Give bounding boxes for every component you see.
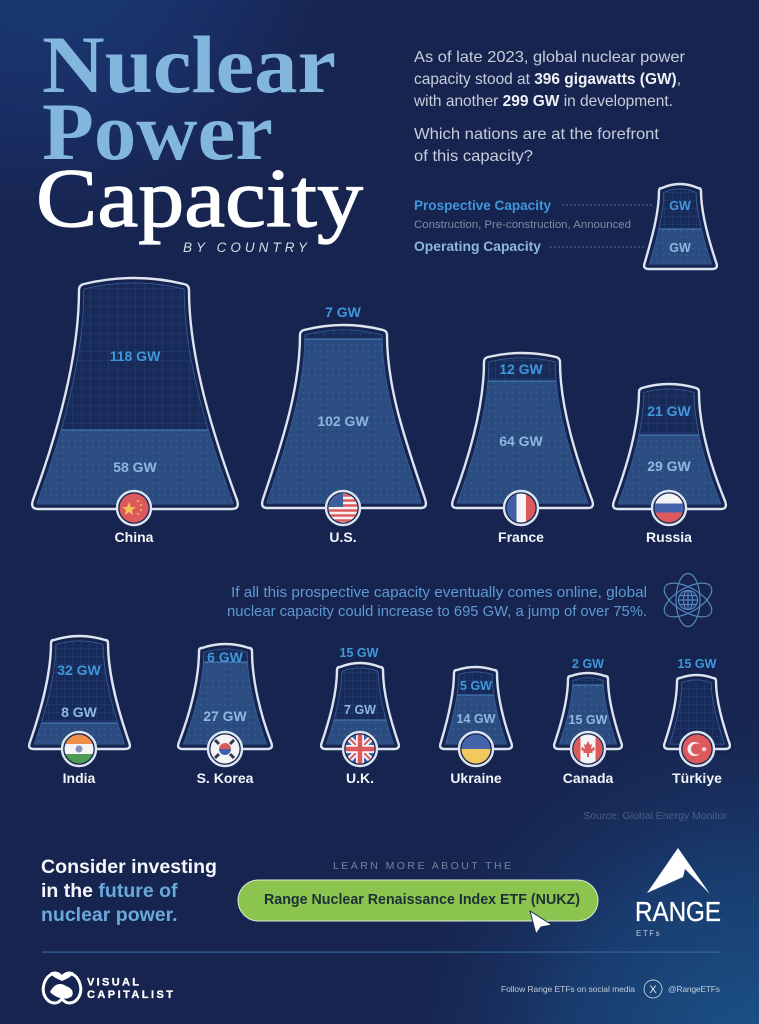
intro text: Which nations are at the forefront [414,126,660,143]
call to action text: nuclear power. [41,904,178,926]
callout [227,585,647,620]
tower: India: 8 GW [61,704,98,720]
tower: U.K. [318,646,403,786]
tower: China [30,270,240,545]
tower: U.S.: 7 GW [325,304,362,320]
tower: France: 64 GW [499,433,544,449]
tower: Russia: 21 GW [647,403,692,419]
icon: atom globe [659,574,717,626]
tower: France [448,348,596,545]
legend note: Construction, Pre-construction, Announced [414,219,631,231]
tower: Türkiye [660,657,735,786]
title: Power [42,86,273,177]
logo: Visual Capitalist: VISUAL [87,976,139,988]
label: Ukraine [450,770,502,786]
flag: U.K. [343,732,377,766]
icon: cursor [530,911,552,934]
label: China [115,529,154,545]
button [238,880,598,921]
flag: S. Korea [208,732,242,766]
tower: Canada [552,659,624,783]
legend label: operating capacity: Operating Capacity [414,239,542,254]
tower: Canada: 2 GW [572,657,604,671]
legend label: prospective capacity: Prospective Capacity [414,198,551,213]
label: France [498,529,544,545]
label: Canada [563,770,613,786]
flag: China [117,491,151,525]
tower: Ukraine: 14 GW [457,712,496,726]
subtitle: by country: BY COUNTRY [183,240,308,255]
tower: Ukraine [438,666,514,783]
call to action text: Consider investing [41,856,217,878]
flag: Türkiye [680,732,714,766]
logo: Range ETFs [635,848,721,938]
call to action text: in the future of [41,880,178,902]
callout: nuclear capacity could increase to 695 GW, a jump of over 75%. [227,604,647,620]
legend tower: GW [669,241,691,255]
tower: China: 58 GW [113,459,158,475]
icon: X: X [649,984,657,996]
callout: If all this prospective capacity eventually comes online, global [231,585,647,601]
intro text: capacity stood at 396 gigawatts (GW), [414,71,681,88]
social follow text: Follow Range ETFs on social media [501,984,635,994]
source: Source: Global Energy Monitor [583,810,727,822]
social handle: @RangeETFs [668,984,720,994]
label: India [63,770,96,786]
flag: Russia [652,491,686,525]
flag: Ukraine [459,732,493,766]
label: Türkiye [672,770,722,786]
flag: U.S. [326,491,360,525]
label: S. Korea [197,770,254,786]
tower: Ukraine: 5 GW [460,679,492,693]
logo: Visual Capitalist [43,972,173,1003]
logo: Range ETFs: RANGE [635,896,721,927]
label: U.K. [346,770,374,786]
tower: U.S. [258,304,430,545]
tower: India [25,630,135,786]
title [36,19,363,245]
tower: Russia: 29 GW [647,458,692,474]
tower: Russia [608,380,730,545]
tower: France: 12 GW [499,361,544,377]
flag: France [504,491,538,525]
tower: Canada: 15 GW [569,713,608,727]
legend tower: GW [669,199,691,213]
flag: Canada [571,732,605,766]
intro text: of this capacity? [414,148,533,165]
tower: China: 118 GW [110,348,161,364]
label: Russia [646,529,692,545]
intro text [413,49,686,165]
intro text: As of late 2023, global nuclear power [414,49,686,66]
tower: U.S.: 102 GW [317,413,369,429]
tower: India: 32 GW [57,662,102,678]
tower: S. Korea: 27 GW [203,708,248,724]
intro text: with another 299 GW in development. [413,93,673,110]
tower: S. Korea: 6 GW [207,649,244,665]
logo: Range ETFs: ETFs [636,929,661,938]
call to action text [41,856,217,926]
icon: X [644,980,662,998]
legend [414,178,720,271]
tower: Türkiye: 15 GW [678,657,717,671]
tower: U.K.: 7 GW [344,703,376,717]
button: Range Nuclear Renaissance Index ETF (NUKZ) [264,892,580,908]
flag: India [62,732,96,766]
label: U.S. [329,529,357,545]
learn more label: LEARN MORE ABOUT THE [333,860,511,872]
legend tower [642,182,718,270]
divider [42,952,720,953]
tower: U.K.: 15 GW [340,646,379,660]
logo: Visual Capitalist: CAPITALIST [87,989,173,1001]
title: Capacity [36,152,363,245]
title: Nuclear [42,19,336,110]
tower: S. Korea [175,640,275,786]
